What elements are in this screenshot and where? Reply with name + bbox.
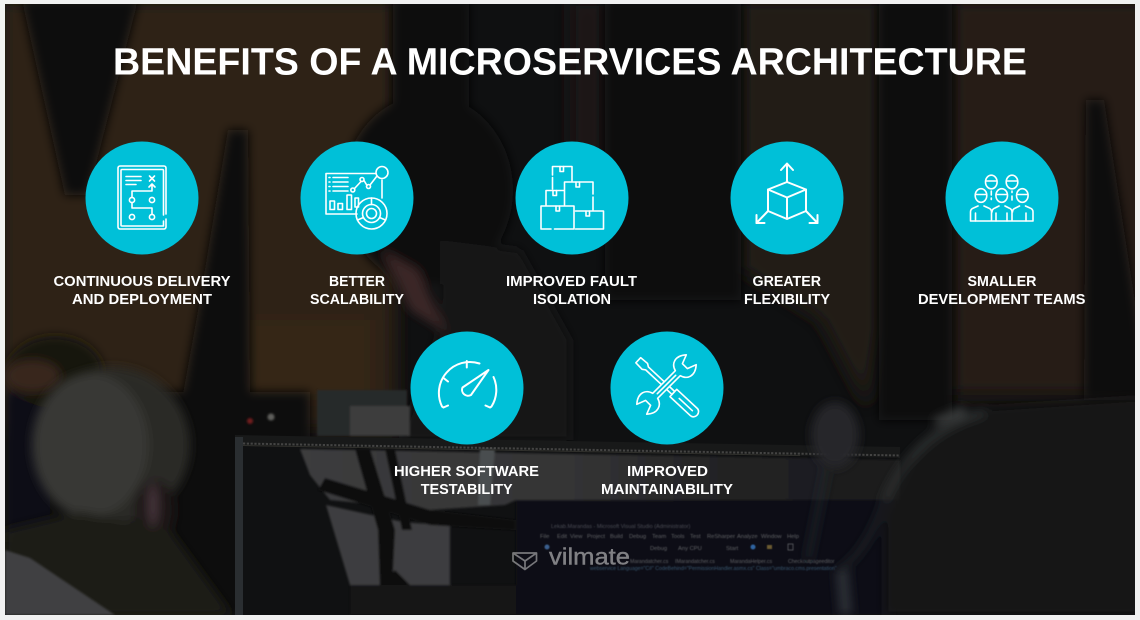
blurred code editor: MarandaHelper.cs [730,559,773,565]
blurred code editor: IMarandatcher.cs [675,559,715,565]
label [601,464,733,498]
label [918,274,1086,308]
blurred code editor: Window [761,534,782,540]
blurred code editor: Edit [557,534,567,540]
label [310,274,404,308]
bald head [5,367,232,615]
icon: speedometer gauge [439,361,496,408]
blurred code editor: Team [652,534,666,540]
blurred code editor: Build [610,534,623,540]
label: IMPROVED FAULT [506,274,637,290]
blurred code editor: Any CPU [678,546,702,552]
item: continuous delivery and deployment [54,142,231,308]
label: HIGHER SOFTWARE [394,464,539,480]
logo: vilmate [513,544,630,570]
icon: roadmap board [118,166,166,229]
icon: logo envelope [513,553,536,570]
title: BENEFITS OF A MICROSERVICES ARCHITECTURE [113,42,1027,84]
back monitor and leds [247,390,410,436]
blurred code editor: Debug [650,546,667,552]
label: MAINTAINABILITY [601,482,733,498]
label: DEVELOPMENT TEAMS [918,292,1086,308]
label: IMPROVED [627,464,708,480]
label: ISOLATION [533,292,611,308]
label: TESTABILITY [421,482,513,498]
item: improved fault isolation [506,142,637,308]
label: AND DEPLOYMENT [72,292,212,308]
item: smaller development teams [918,142,1086,308]
blurred code editor: Help [787,534,799,540]
blurred code editor: Debug [629,534,646,540]
blurred code editor [540,524,837,572]
label [394,464,539,498]
icon: cube with arrows [756,164,818,223]
foreground headset person [808,398,1140,615]
blurred code editor: Checkoutpageeditor [788,559,835,565]
blurred code editor: Tools [671,534,685,540]
blurred code editor: Analyze [737,534,758,540]
blurred code editor: Start [726,546,739,552]
label: SMALLER [968,274,1037,290]
icon: stacked boxes [541,166,604,229]
label [54,274,231,308]
label [506,274,637,308]
big monitor [235,435,900,615]
blurred code editor: webservice Language="C#" CodeBehind="PermissionHandler.asmx.cs" Class="umbraco.cms.presentation" [590,566,837,572]
logo: vilmate: vilmate [549,544,630,570]
item: better scalability [300,142,414,308]
item: improved maintainability [601,332,733,498]
blurred code editor: Lekab.Marandas - Microsoft Visual Studio (Administrator) [551,524,690,530]
icon: analytics dashboard [326,166,388,229]
blurred code editor: ReSharper [707,534,735,540]
label: FLEXIBILITY [744,292,830,308]
label: CONTINUOUS DELIVERY [54,274,231,290]
label [744,274,830,308]
label: BETTER [329,274,386,290]
label: GREATER [752,274,822,290]
blurred code editor: Test [690,534,701,540]
blurred code editor: File [540,534,549,540]
blurred code editor: Marandatcher.cs [630,559,669,565]
label: SCALABILITY [310,292,404,308]
item: greater flexibility [730,142,844,308]
blurred code editor: View [570,534,583,540]
blurred code editor: Project [587,534,605,540]
icon: screwdriver and wrench [634,352,701,419]
icon: team of people [970,175,1033,221]
item: higher software testability [394,332,539,498]
